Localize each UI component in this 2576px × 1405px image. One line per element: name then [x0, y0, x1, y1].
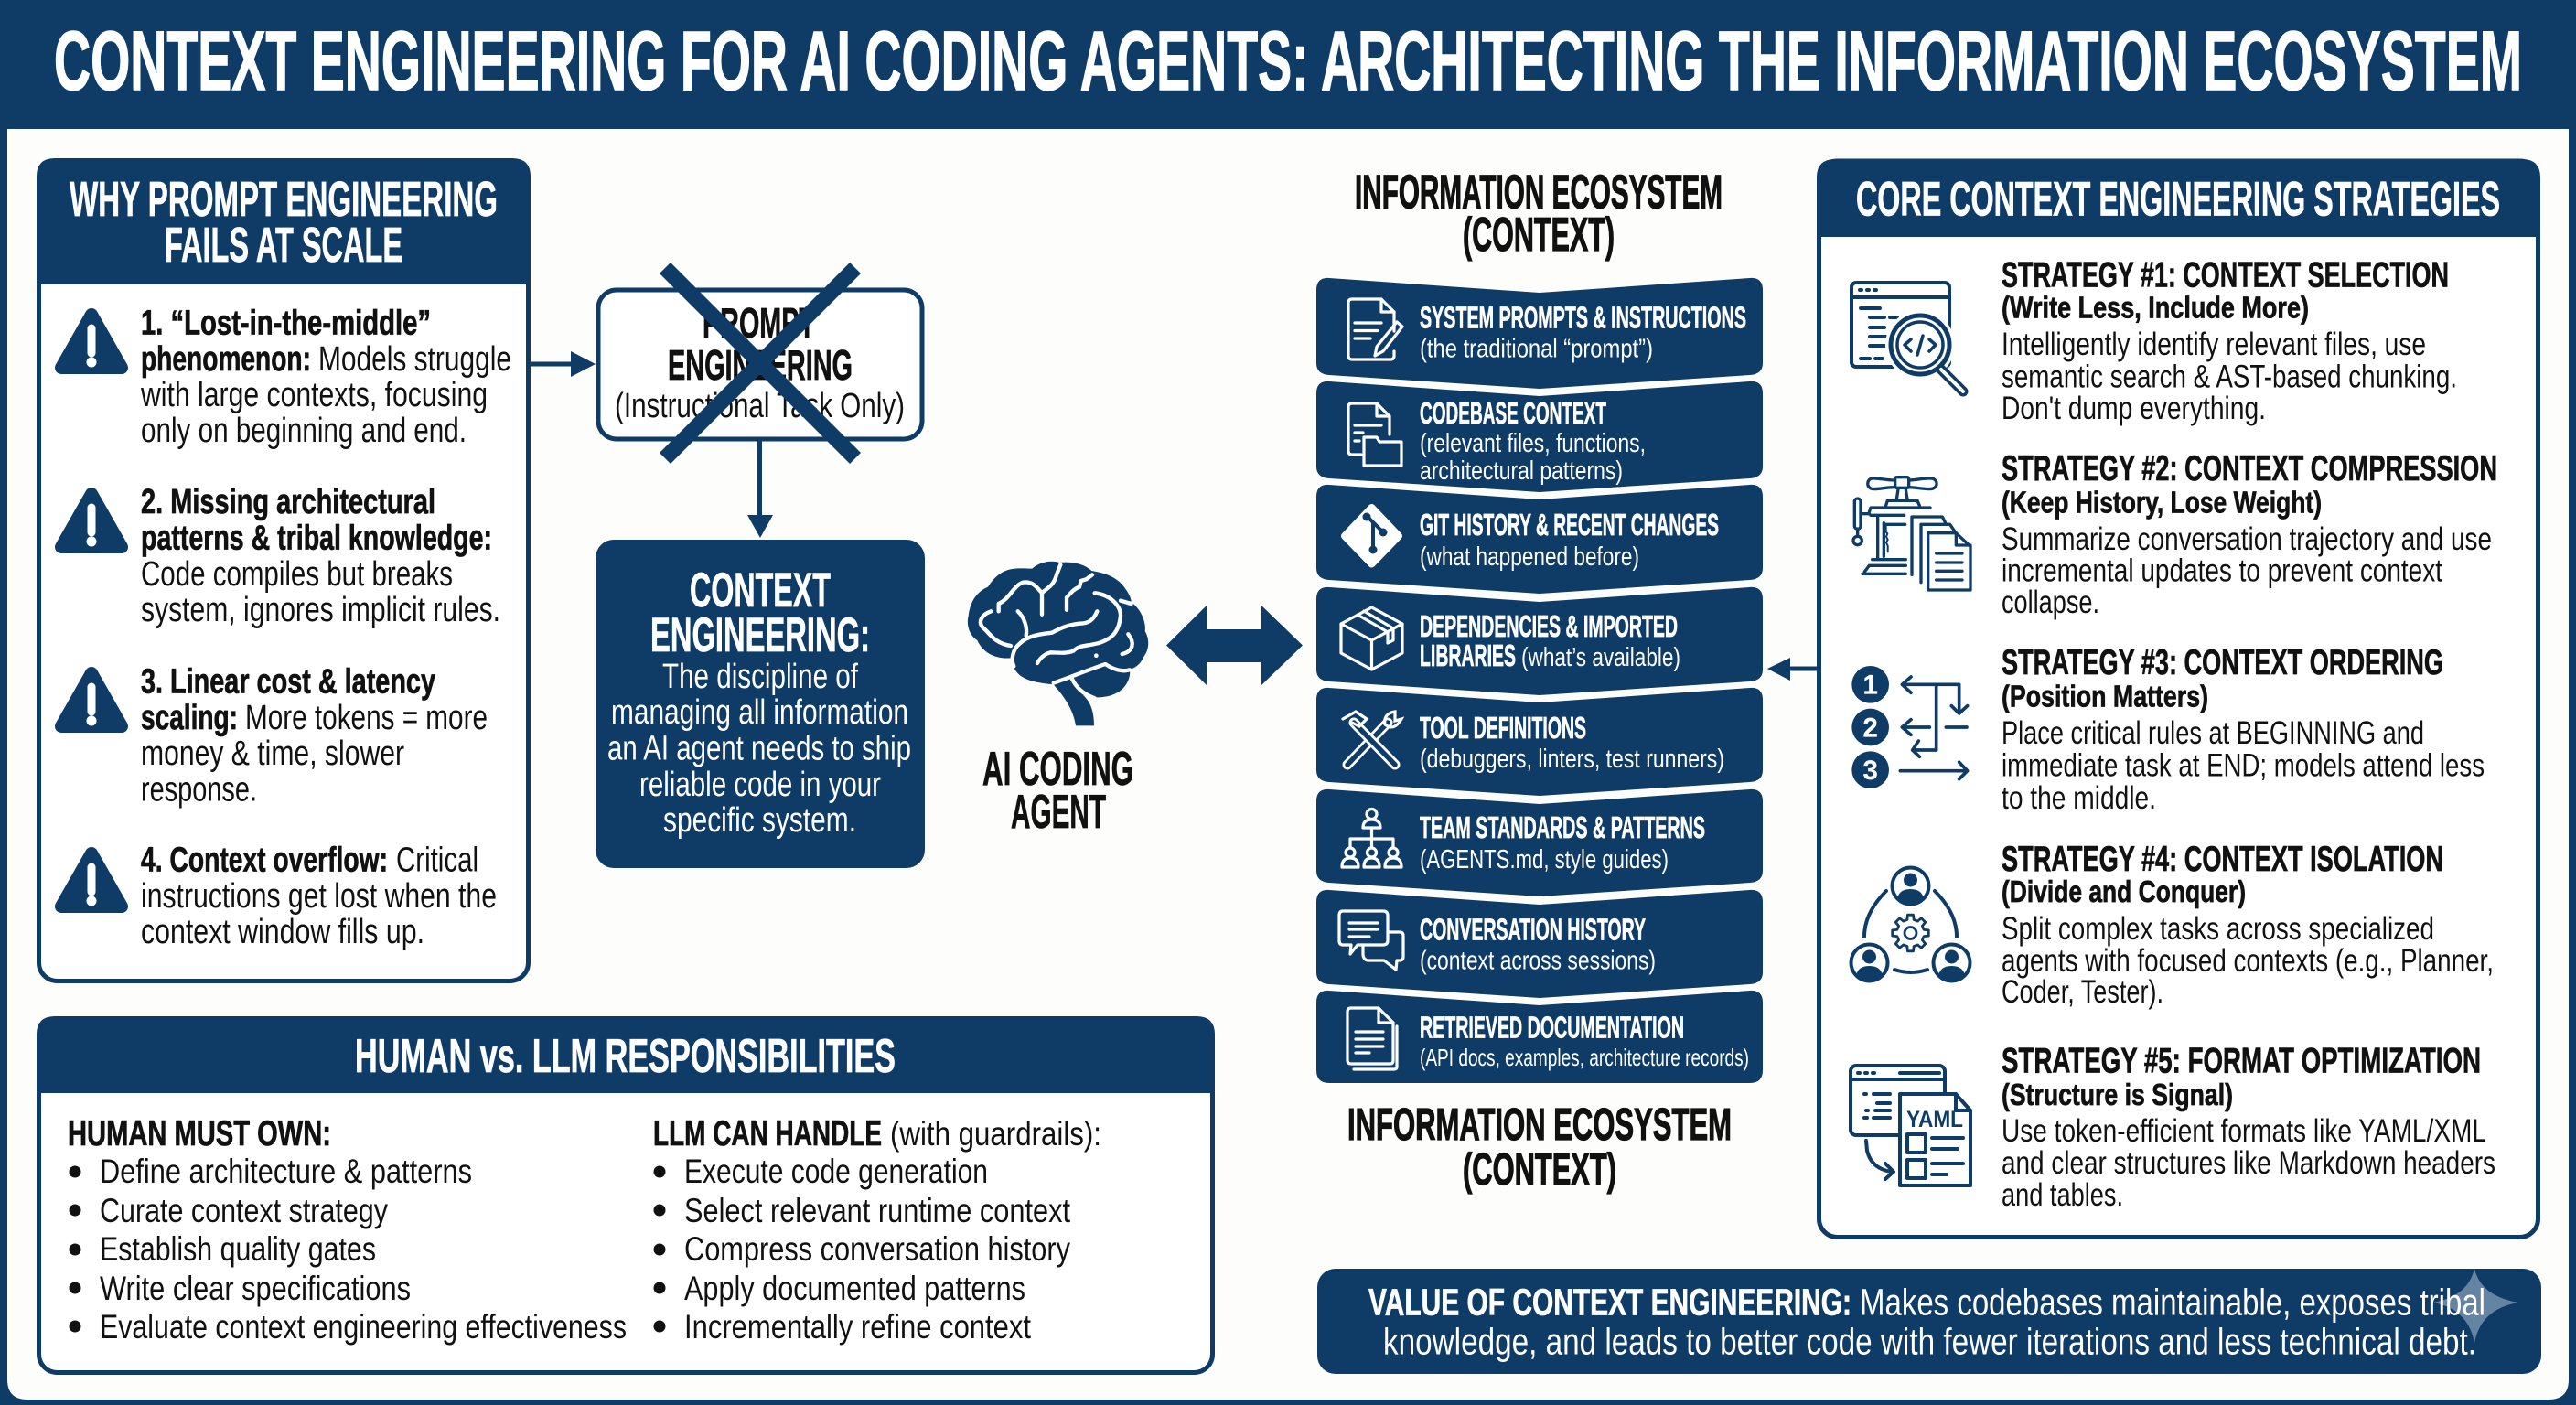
item 4: context overflow: Critical	[396, 842, 478, 880]
label: AI coding agent: AI CODING	[982, 743, 1133, 796]
strategy 5: and tables.	[2002, 1177, 2123, 1213]
box: context engineering definition: an AI agent needs to ship	[607, 730, 911, 768]
strategy 3	[2002, 643, 2485, 816]
column: LLM can handle: LLM CAN HANDLE	[653, 1114, 882, 1153]
panel: core context engineering strategies	[1817, 159, 2540, 1237]
heading: information ecosystem top	[1355, 166, 1723, 262]
item 4: context overflow: 4. Context overflow:	[141, 842, 388, 880]
column: human must own	[68, 1114, 627, 1346]
item 1: lost in the middle: only on beginning and end.	[141, 412, 467, 450]
strategy 2: (Keep History, Lose Weight)	[2002, 485, 2322, 520]
layer: conversation history: CONVERSATION HISTORY	[1420, 913, 1646, 946]
icon: numbered ordering: 1	[1863, 670, 1878, 701]
panel: why prompt engineering fails at scale	[37, 158, 531, 981]
strategy 4: (Divide and Conquer)	[2002, 874, 2246, 908]
layer: dependencies: (what’s available)	[1521, 643, 1680, 672]
column: human must own: HUMAN MUST OWN:	[68, 1114, 331, 1153]
icon: document and pencil	[1348, 299, 1402, 359]
heading: information ecosystem top: INFORMATION ECOSYSTEM	[1355, 166, 1723, 220]
layer: dependencies	[1316, 587, 1763, 695]
layer: git history: (what happened before)	[1420, 542, 1639, 572]
panel heading: WHY PROMPT ENGINEERING	[70, 172, 498, 227]
strategy 5	[2002, 1041, 2496, 1213]
icon: isolated agents	[1852, 867, 1970, 981]
layer: codebase context	[1316, 381, 1763, 492]
panel heading	[37, 158, 531, 284]
heading: information ecosystem bottom: INFORMATION ECOSYSTEM	[1347, 1100, 1732, 1150]
layer: conversation history: (context across sessions)	[1420, 946, 1656, 975]
item 3: linear cost and latency: More tokens = more	[245, 699, 488, 737]
icon: warning triangle 3	[61, 673, 122, 726]
box: prompt engineering crossed out	[598, 268, 922, 458]
icon: warning triangle 2	[61, 494, 122, 547]
icon: format yaml document: YAML	[1906, 1107, 1963, 1132]
column: human must own: Establish quality gates	[100, 1230, 376, 1268]
item 3: linear cost and latency: money & time, slower	[141, 735, 404, 773]
item 3: linear cost and latency	[141, 662, 488, 809]
layer: system prompts	[1316, 278, 1763, 389]
column: human must own: Curate context strategy	[100, 1192, 388, 1229]
layer: system prompts: (the traditional “prompt”)	[1420, 335, 1653, 364]
item 3: linear cost and latency: scaling:	[141, 699, 238, 737]
icon: brain	[968, 562, 1148, 725]
box: context engineering definition: CONTEXT	[690, 563, 831, 617]
column: LLM can handle: Apply documented patterns	[684, 1270, 1025, 1307]
icon: team org chart	[1342, 809, 1401, 867]
box: prompt engineering crossed out: PROMPT	[703, 299, 815, 347]
item 1: lost in the middle: Models struggle	[318, 340, 511, 379]
item 2: missing architectural patterns: 2. Missing architectural	[141, 483, 435, 521]
layer: codebase context: CODEBASE CONTEXT	[1420, 396, 1606, 430]
arrow: two-way agent and context	[1166, 606, 1303, 685]
column: LLM can handle: Compress conversation history	[684, 1230, 1070, 1268]
item 2: missing architectural patterns: patterns & tribal knowledge:	[141, 520, 492, 558]
layer: git history	[1316, 485, 1763, 594]
box: prompt engineering crossed out: ENGINEERING	[668, 341, 853, 389]
item 3: linear cost and latency: 3. Linear cost & latency	[141, 662, 435, 701]
column: human must own: Evaluate context engineering effectiveness	[100, 1308, 627, 1346]
panel: context stack	[1316, 278, 1763, 1083]
layer: team standards: TEAM STANDARDS & PATTERNS	[1420, 810, 1705, 844]
icon: package box	[1341, 607, 1402, 670]
box: context engineering definition: The discipline of	[662, 658, 858, 696]
item 4: context overflow: instructions get lost when the	[141, 877, 497, 916]
heading: information ecosystem bottom	[1347, 1100, 1732, 1195]
strategy 4	[2002, 840, 2494, 1010]
column: human must own: Define architecture & patterns	[100, 1153, 472, 1190]
box: context engineering definition	[596, 540, 925, 868]
layer: git history: GIT HISTORY & RECENT CHANGES	[1420, 508, 1719, 542]
strategy 4: Coder, Tester).	[2002, 974, 2163, 1010]
layer: retrieved documentation: RETRIEVED DOCUMENTATION	[1420, 1010, 1684, 1045]
column: LLM can handle: Incrementally refine context	[684, 1308, 1032, 1346]
callout: value of context engineering: VALUE OF CONTEXT ENGINEERING:	[1368, 1281, 1852, 1323]
column: LLM can handle	[653, 1114, 1101, 1346]
item 1: lost in the middle: 1. “Lost-in-the-middle”	[141, 304, 431, 342]
strategy 4: Split complex tasks across specialized	[2002, 911, 2434, 947]
layer: conversation history	[1316, 890, 1763, 998]
item 1: lost in the middle: phenomenon:	[141, 340, 311, 379]
heading: information ecosystem bottom: (CONTEXT)	[1463, 1145, 1616, 1195]
column: LLM can handle: (with guardrails):	[890, 1115, 1101, 1153]
panel heading	[37, 1016, 1215, 1093]
label: AI coding agent: AGENT	[1011, 786, 1106, 839]
box: context engineering definition: reliable code in your	[639, 766, 881, 804]
layer: team standards	[1316, 789, 1763, 896]
layer: dependencies: DEPENDENCIES & IMPORTED	[1420, 609, 1678, 643]
strategy 1: Intelligently identify relevant files, use	[2002, 327, 2426, 362]
icon: numbered ordering: 3	[1863, 756, 1878, 786]
icon: git diamond	[1345, 508, 1399, 563]
box: context engineering definition: ENGINEERING:	[650, 608, 870, 662]
layer: retrieved documentation	[1316, 991, 1763, 1083]
icon: compression press	[1853, 477, 1970, 590]
item 1: lost in the middle: with large contexts, focusing	[140, 376, 488, 414]
icon: numbered ordering	[1852, 666, 1968, 788]
strategy 2: incremental updates to prevent context	[2002, 552, 2442, 589]
icon: documents	[1347, 1008, 1397, 1069]
icon: chat bubbles	[1339, 911, 1403, 970]
label: AI coding agent	[982, 743, 1133, 839]
column: LLM can handle: Select relevant runtime context	[684, 1192, 1071, 1229]
icon: warning triangle 4	[61, 853, 122, 906]
arrow: strategies to context stack	[1767, 658, 1818, 681]
layer: tool definitions	[1316, 688, 1763, 796]
item 2: missing architectural patterns	[141, 483, 500, 629]
layer: dependencies: LIBRARIES	[1420, 638, 1516, 672]
item 2: missing architectural patterns: Code compiles but breaks	[141, 555, 453, 594]
strategy 3: to the middle.	[2002, 780, 2156, 816]
item 2: missing architectural patterns: system, ignores implicit rules.	[141, 591, 500, 629]
layer: tool definitions: TOOL DEFINITIONS	[1420, 711, 1586, 745]
strategy 1	[2002, 256, 2457, 426]
item 1: lost in the middle	[140, 304, 511, 450]
item 3: linear cost and latency: response.	[141, 770, 257, 809]
icon: document and folder	[1348, 403, 1401, 466]
layer: retrieved documentation: (API docs, examples, architecture records)	[1420, 1044, 1749, 1071]
box: prompt engineering crossed out: (Instructional Task Only)	[615, 387, 905, 425]
arrow: prompt engineering to context engineering	[747, 440, 773, 538]
icon: crossed tools	[1343, 712, 1401, 765]
box: context engineering definition: managing all information	[611, 693, 908, 732]
layer: codebase context: (relevant files, functions,	[1420, 429, 1646, 458]
icon: numbered ordering: 2	[1863, 713, 1878, 743]
column: LLM can handle: Execute code generation	[684, 1153, 988, 1190]
layer: team standards: (AGENTS.md, style guides)	[1420, 845, 1669, 874]
panel heading: HUMAN vs. LLM RESPONSIBILITIES	[355, 1030, 896, 1083]
icon: format yaml document	[1851, 1066, 1970, 1185]
strategy 1: (Write Less, Include More)	[2002, 291, 2309, 324]
strategy 5: (Structure is Signal)	[2002, 1078, 2233, 1111]
column: human must own: Write clear specifications	[100, 1270, 411, 1307]
item 4: context overflow: context window fills up.	[141, 913, 424, 951]
layer: codebase context: architectural patterns)	[1420, 456, 1623, 486]
strategy 2: collapse.	[2002, 585, 2099, 620]
strategy 1: Don't dump everything.	[2002, 391, 2266, 426]
icon: code search	[1852, 283, 1963, 391]
strategy 3: Place critical rules at BEGINNING and	[2002, 715, 2424, 751]
box: context engineering definition: specific system.	[663, 801, 856, 840]
layer: tool definitions: (debuggers, linters, test runners)	[1420, 745, 1724, 774]
strategy 1: semantic search & AST-based chunking.	[2002, 359, 2457, 395]
panel: human vs LLM responsibilities	[37, 1016, 1215, 1372]
icon: warning triangle 1	[61, 315, 122, 368]
strategy 3: (Position Matters)	[2002, 679, 2208, 713]
callout: value of context engineering	[1317, 1269, 2541, 1374]
panel heading	[1817, 159, 2540, 237]
layer: system prompts: SYSTEM PROMPTS & INSTRUCTIONS	[1420, 300, 1746, 335]
icon: cross out	[665, 268, 855, 458]
icon: sparkle	[2433, 1269, 2518, 1343]
heading: information ecosystem top: (CONTEXT)	[1463, 209, 1615, 262]
strategy 2	[2002, 449, 2497, 620]
arrow: panel to prompt engineering	[531, 351, 596, 377]
panel heading: FAILS AT SCALE	[165, 218, 402, 273]
item 4: context overflow	[141, 842, 497, 951]
